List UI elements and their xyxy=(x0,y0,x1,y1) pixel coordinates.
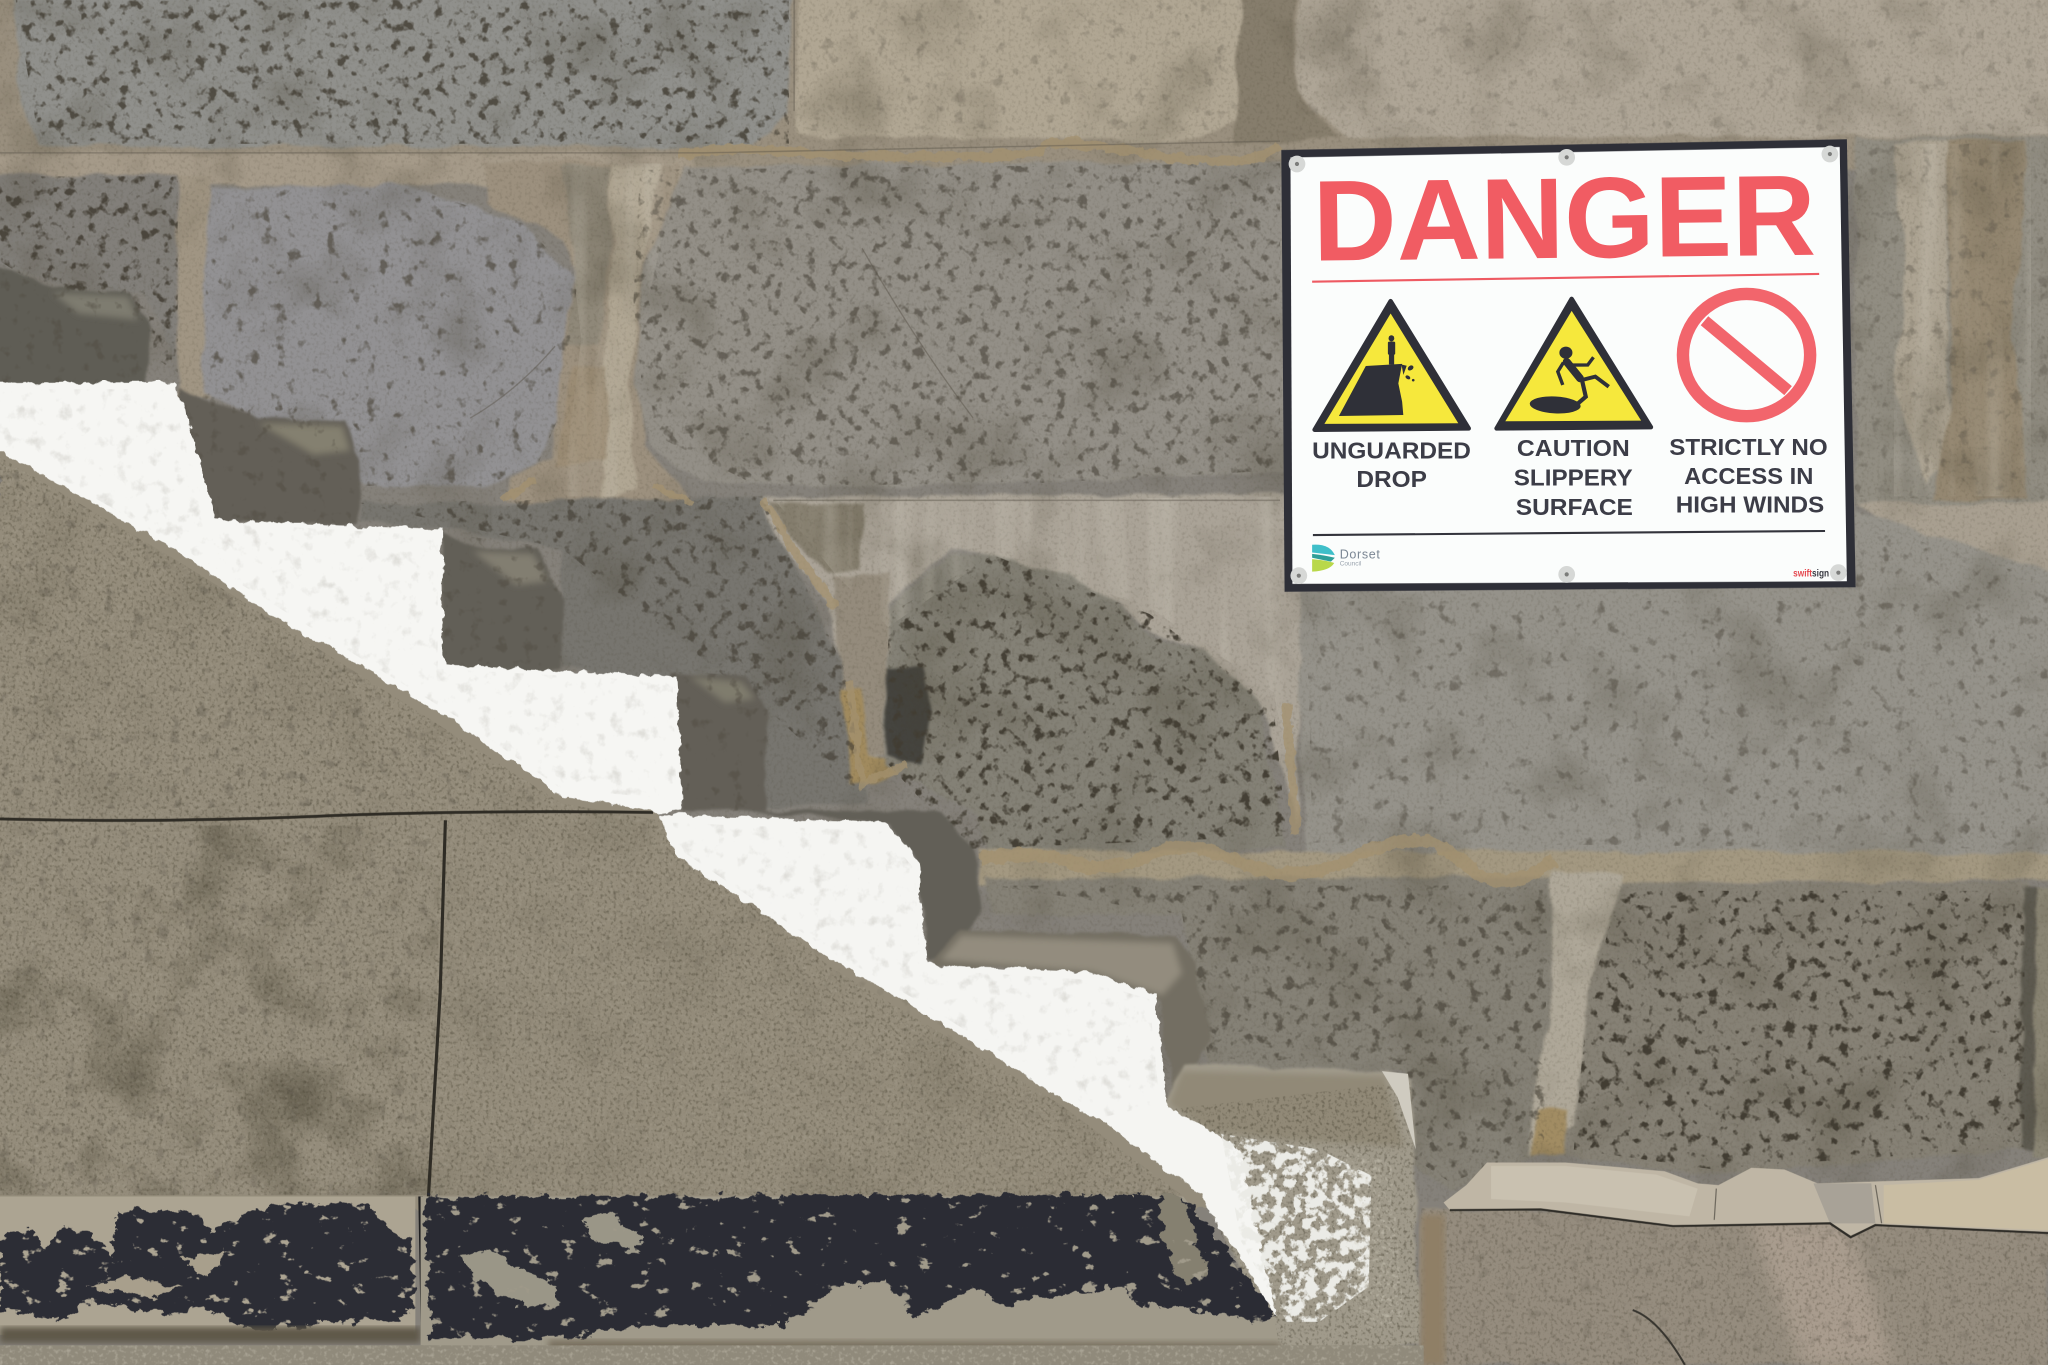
danger sign xyxy=(1281,139,1856,592)
flaking white paint on bottom step xyxy=(1221,1134,1404,1332)
logo: Dorset Council xyxy=(1312,545,1380,572)
wall mortar lines xyxy=(0,0,1280,500)
label: caution slippery surface: CAUTION xyxy=(1517,435,1630,461)
mounting screws xyxy=(1289,146,1847,584)
bottom ground strip xyxy=(0,1345,1424,1365)
label: unguarded drop xyxy=(1312,437,1471,492)
sign title: DANGER xyxy=(1312,152,1816,286)
stone joint: T-shaped render xyxy=(485,161,696,529)
black paint plinth: right block xyxy=(421,1195,1280,1358)
row three right block xyxy=(1293,512,2048,859)
red divider xyxy=(1312,274,1819,282)
icon: prohibition circle xyxy=(1683,294,1810,416)
label: strictly no access in high winds: STRICTLY NO xyxy=(1669,434,1828,460)
icon: unguarded drop warning triangle xyxy=(1315,301,1469,430)
sandstone surface texture xyxy=(0,457,1182,1195)
ground paving xyxy=(1421,1208,2048,1365)
sign backing board xyxy=(1281,139,1856,592)
pale stone ledge along wall foot xyxy=(1444,1157,2048,1237)
label: caution slippery surface: SURFACE xyxy=(1516,494,1633,520)
row three grey blocks xyxy=(359,496,869,807)
label: caution slippery surface xyxy=(1514,435,1633,520)
pale render band xyxy=(760,493,1301,855)
label: strictly no access in high winds: HIGH WINDS xyxy=(1676,492,1824,518)
label: strictly no access in high winds xyxy=(1669,434,1828,518)
footer divider xyxy=(1313,531,1825,535)
tan mortar seams xyxy=(503,143,1554,881)
logo: Dorset Council: Council xyxy=(1340,560,1362,567)
logo: Dorset Council: Dorset xyxy=(1340,547,1380,561)
maker mark: swiftsign: swiftsign xyxy=(1793,569,1829,580)
black paint plinth: left block xyxy=(0,1196,421,1343)
icon: slippery surface warning triangle xyxy=(1497,299,1651,428)
white paint: upper stair run xyxy=(0,381,682,812)
sign white face xyxy=(1290,147,1847,584)
label: strictly no access in high winds: ACCESS IN xyxy=(1684,463,1813,489)
large central block xyxy=(633,161,1286,488)
white paint: lower stair run xyxy=(660,814,1277,1317)
stair side wall: sandstone blocks xyxy=(0,451,1208,1208)
label: caution slippery surface: SLIPPERY xyxy=(1514,465,1633,491)
block joints on stair side xyxy=(0,812,653,1345)
label: unguarded drop: DROP xyxy=(1356,466,1427,492)
lower row blocks and mortar xyxy=(980,849,2048,886)
stair tread blocks xyxy=(0,261,1421,1353)
label: unguarded drop: UNGUARDED xyxy=(1312,437,1471,463)
